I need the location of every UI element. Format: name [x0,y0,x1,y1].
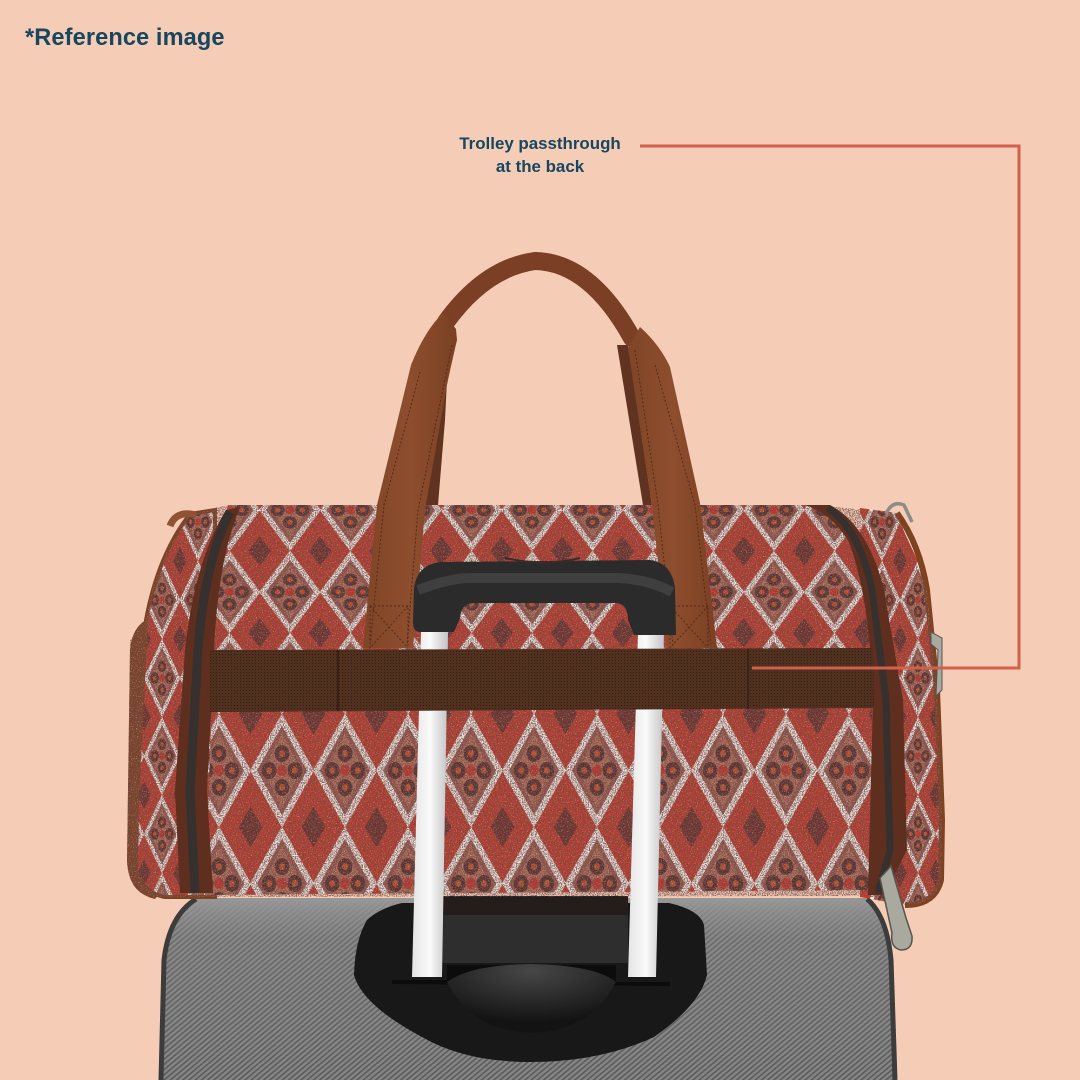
right zipper [805,505,907,895]
suitcase body [160,898,896,1080]
callout: trolley passthrough: at the back [496,157,585,176]
duffel bag [125,500,945,950]
side hook [931,632,942,696]
right ring [886,504,912,522]
left end cap [136,510,215,897]
right pole [628,632,664,977]
handle arch [446,261,632,338]
trolley grip [413,560,676,635]
recessed panel [442,896,628,915]
trolley passthrough strap [210,648,874,712]
left zipper [175,507,240,893]
reference image label: *Reference image [25,25,225,51]
fabric grain [125,500,945,910]
left pole [412,632,448,977]
right end cap [860,508,942,905]
stitched X boxes [370,606,708,648]
carry handles [363,261,717,648]
handle recess dome [447,964,616,1033]
left handle strap [363,313,457,648]
right handle strap [628,327,717,648]
trolley base plate [354,903,707,1062]
back straps [423,380,447,505]
left ring [170,514,196,526]
zipper pull [880,866,912,950]
suitcase [160,896,896,1080]
outer pocket bulge [127,620,170,899]
leader line arrow [640,146,1019,668]
main pattern panel [190,505,890,900]
trolley handle and poles [412,558,676,977]
stitching [370,345,711,645]
callout: trolley passthrough [459,134,621,176]
callout: trolley passthrough: Trolley passthrough [459,134,621,153]
